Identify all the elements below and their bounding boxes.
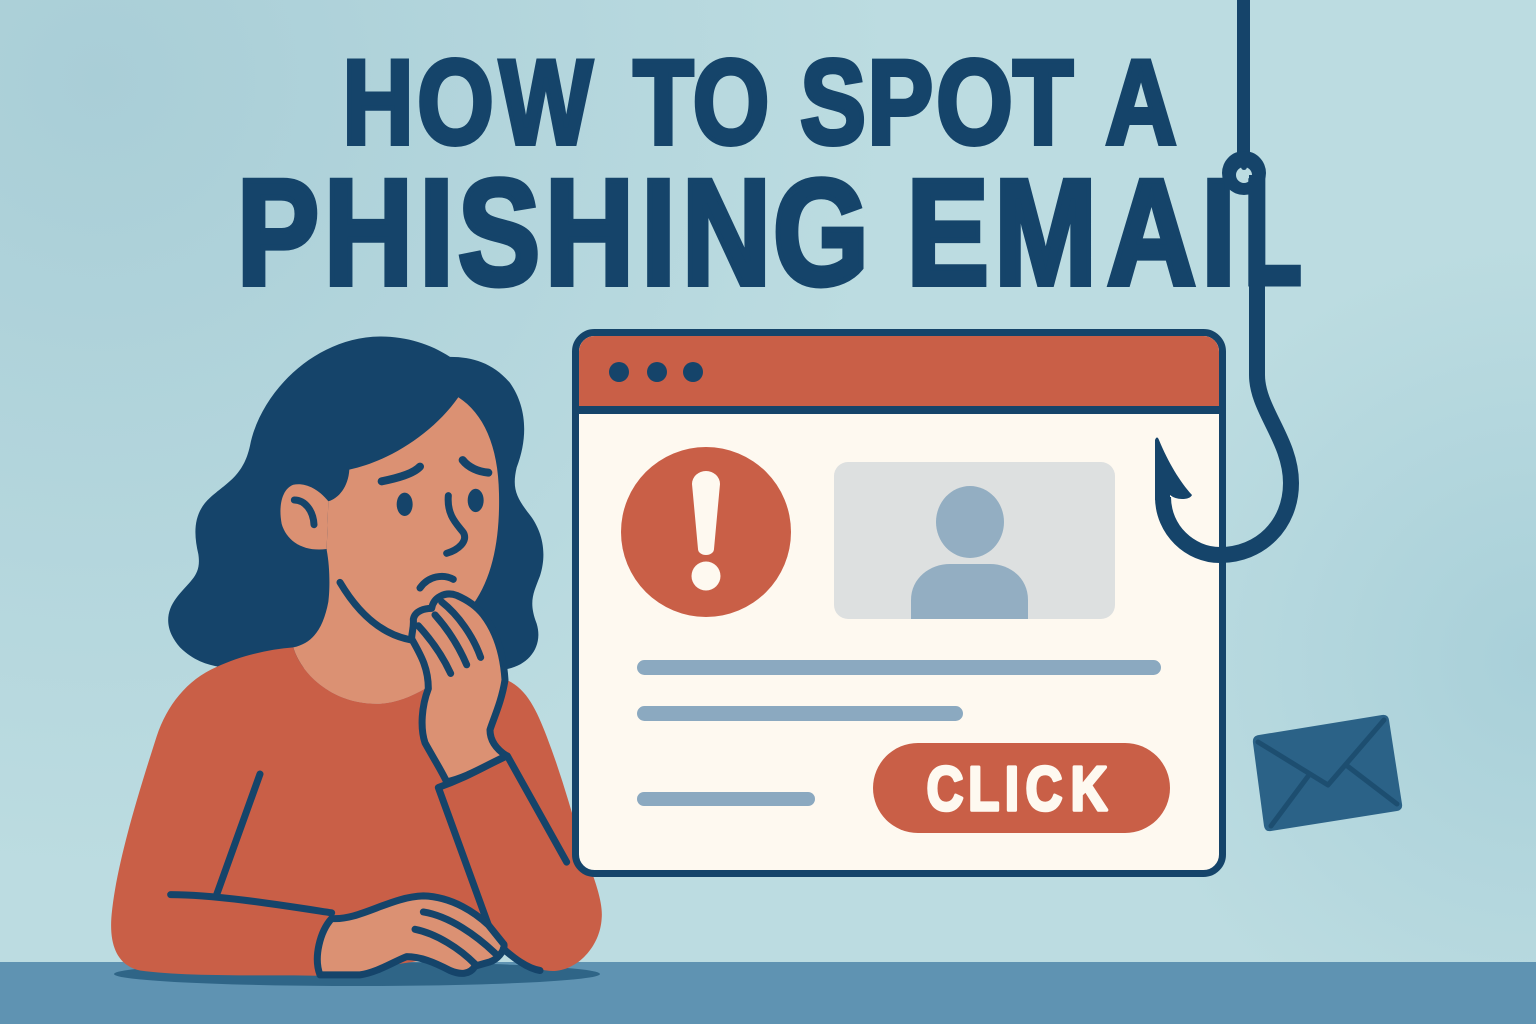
- hook shank and bend: [1163, 175, 1291, 555]
- text line 2: [637, 706, 963, 721]
- ear detail: [294, 500, 314, 525]
- envelope icon: [1253, 715, 1402, 831]
- window body: [576, 332, 1222, 874]
- hook barb: [1155, 438, 1192, 510]
- resting hand fingers: [415, 912, 495, 964]
- text line 1: [637, 660, 1161, 675]
- table shadow: [114, 962, 600, 986]
- title: HOW TO SPOT A: [343, 36, 1177, 170]
- hook line: [1237, 0, 1250, 160]
- warning icon: [621, 447, 791, 617]
- fishing hook: [1155, 0, 1291, 555]
- title: [237, 36, 1302, 317]
- hook eye notch: [1241, 164, 1247, 170]
- window dots: [609, 362, 703, 382]
- jaw line: [340, 582, 412, 640]
- woman: [111, 336, 602, 976]
- nose: [447, 496, 465, 553]
- title: PHISHING EMAI: [237, 149, 1236, 317]
- sleeve lines: [438, 756, 567, 925]
- resting hand: [317, 896, 504, 975]
- click button: CLICK: [927, 755, 1107, 824]
- fingers: [418, 602, 481, 673]
- table surface: [0, 962, 1536, 1024]
- mouth: [420, 576, 453, 588]
- eyebrows: [382, 460, 488, 481]
- email window: [576, 332, 1222, 874]
- window header: [579, 336, 1219, 406]
- text line 3: [637, 792, 815, 806]
- elbow line: [503, 949, 540, 971]
- hair: [168, 336, 543, 669]
- hook eye: [1222, 151, 1266, 195]
- left arm lines: [171, 774, 332, 913]
- sender photo placeholder: [834, 462, 1115, 619]
- header divider: [579, 406, 1219, 414]
- sweater: [111, 647, 602, 976]
- face and neck: [293, 397, 499, 704]
- click button: [873, 743, 1170, 833]
- raised hand: [412, 594, 507, 782]
- ear: [280, 484, 328, 549]
- title: L: [1244, 148, 1302, 316]
- eyes: [397, 489, 484, 516]
